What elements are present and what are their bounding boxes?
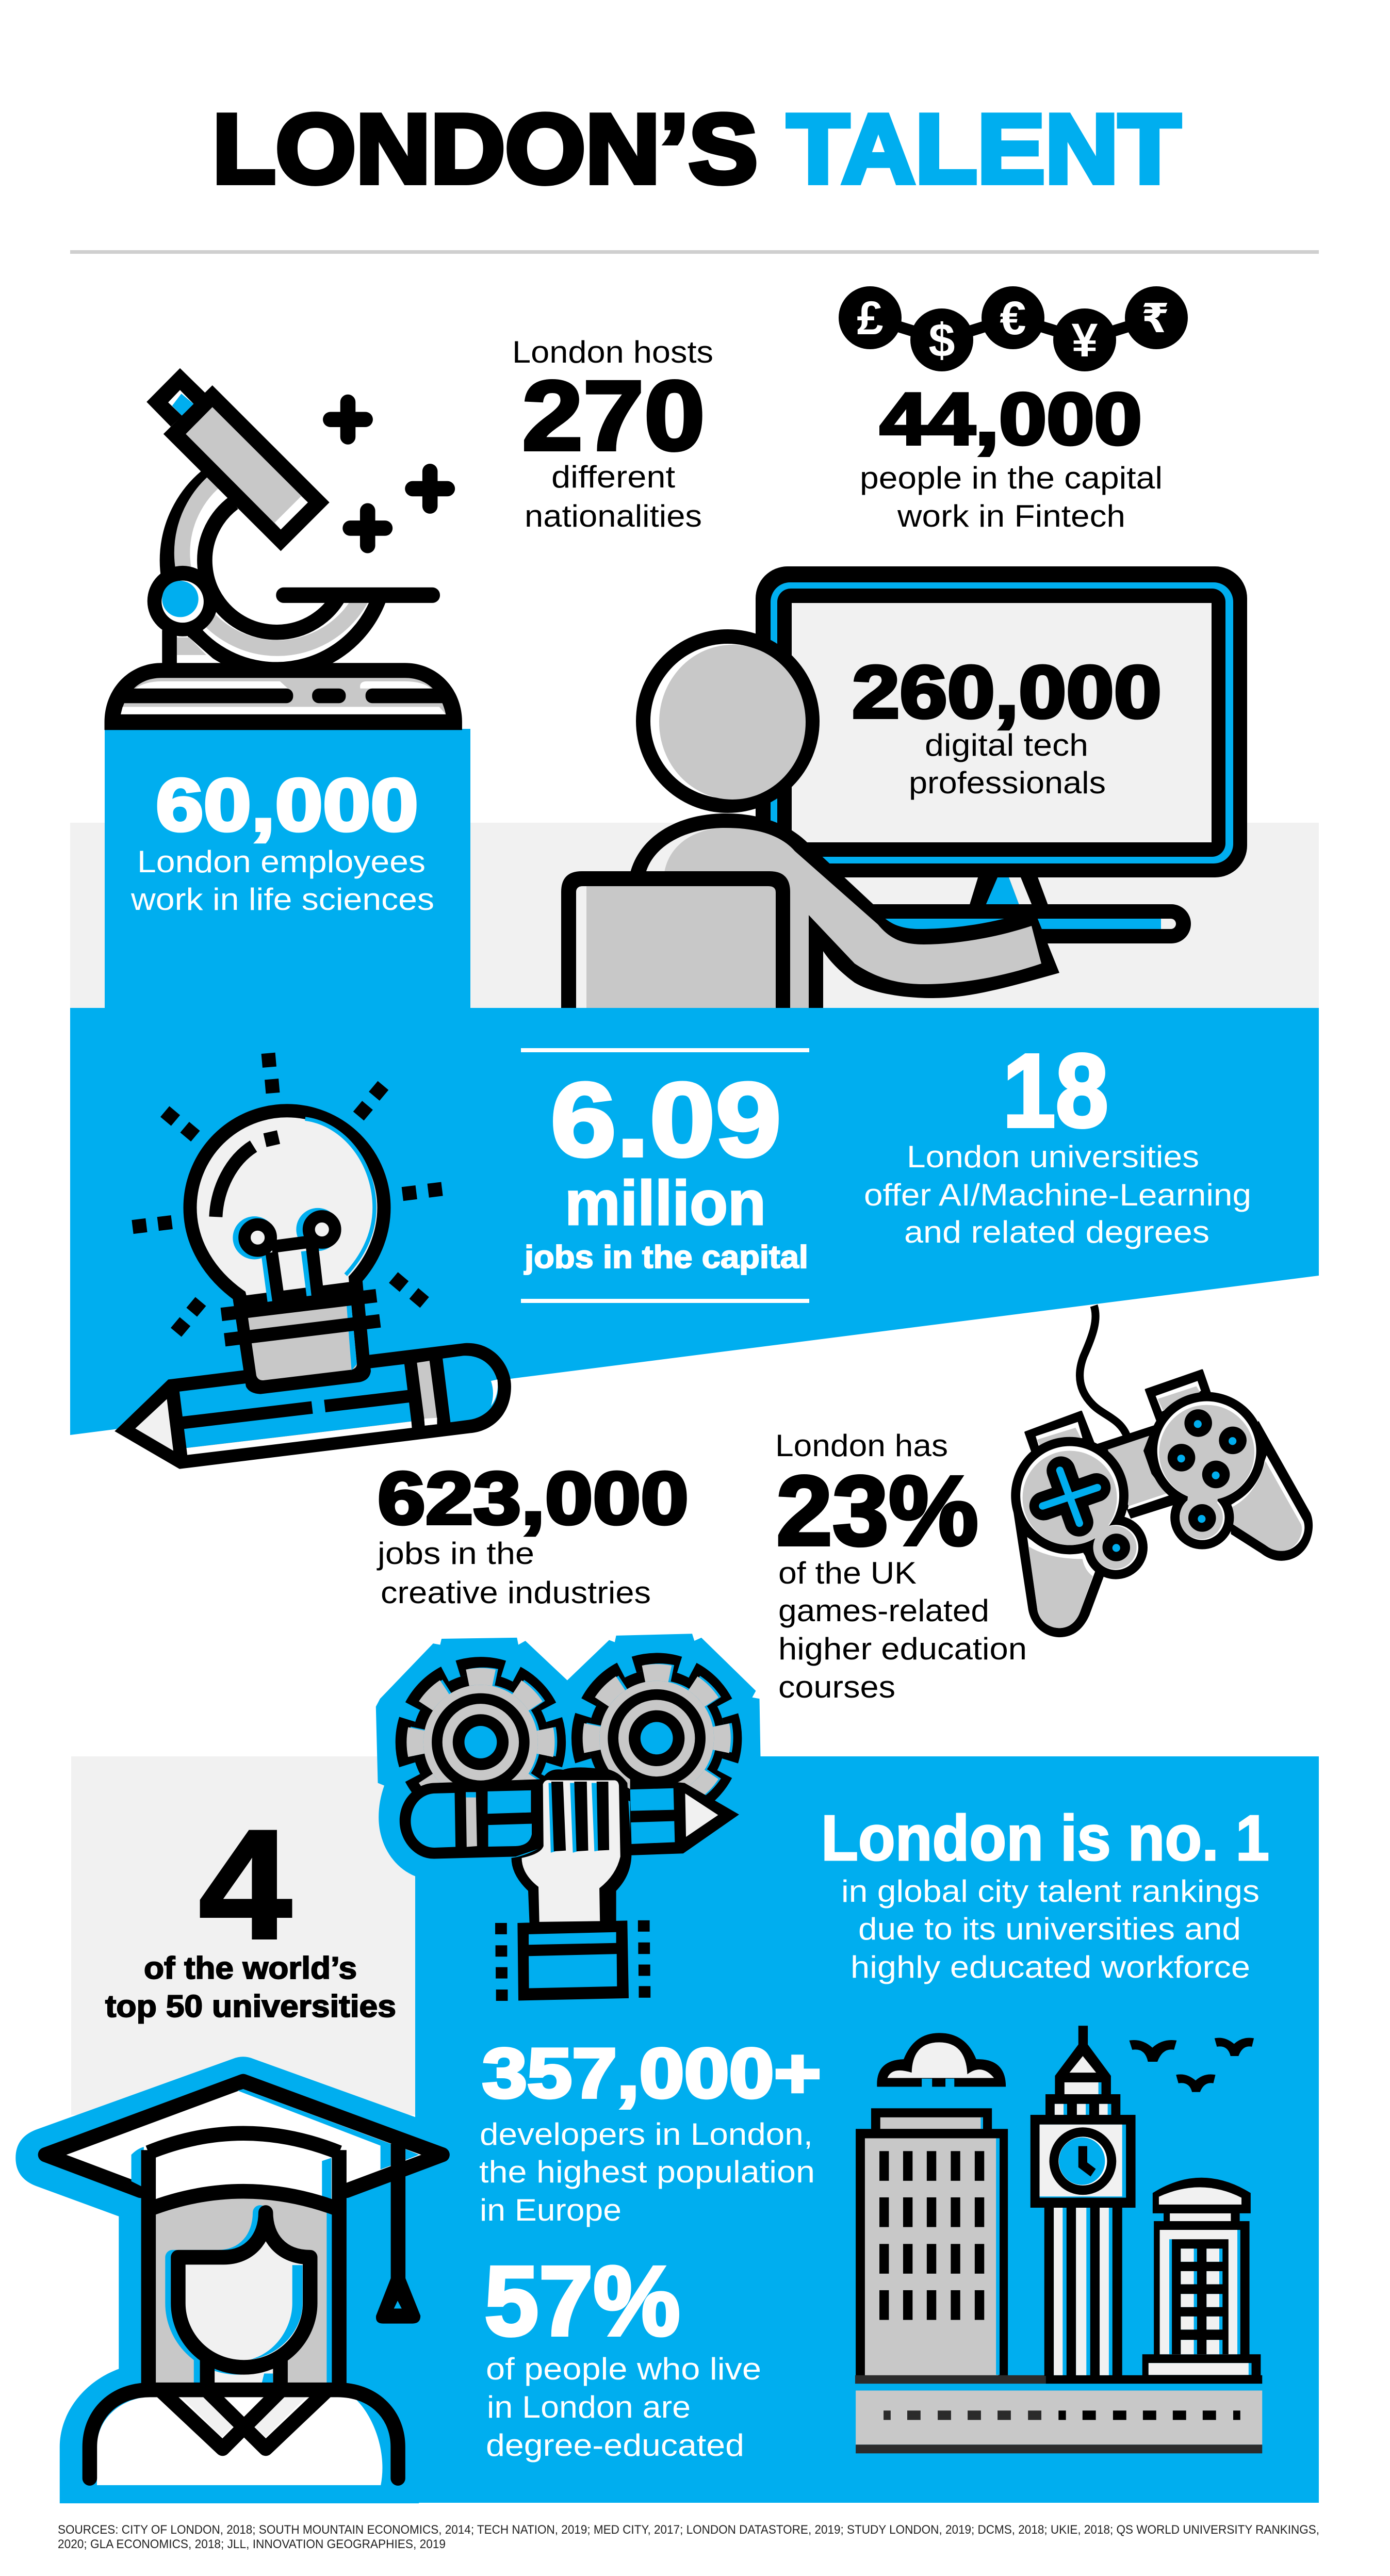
text: 23% games: higher education [778,1632,1027,1666]
text: sources [58,2523,1319,2551]
text: 270 nationalities: London hosts [512,335,713,369]
text: 260,000 digital tech: professionals [909,765,1106,800]
text: 6.09 million jobs [521,1048,809,1303]
text: 23% games: of the UK [778,1556,917,1590]
text: 44,000 fintech [860,378,1163,533]
text: 18 universities [864,1032,1251,1249]
text: 18 universities: 18 [1003,1032,1108,1149]
text: 623,000 creative industries [377,1457,689,1610]
text: 357,000+ developers [479,2034,821,2227]
text: 23% games: courses [778,1670,895,1704]
text: London is no. 1: highly educated workforce [851,1950,1250,1984]
text: 18 universities: offer AI/Machine-Learning [864,1178,1251,1212]
text: 60,000 life sciences [130,763,434,917]
icon: person at computer [561,629,1059,1008]
text: London is no. 1: London is no. 1 [821,1803,1269,1874]
text: 60,000 life sciences: work in life sciences [130,882,434,917]
icon: currency coins [839,286,1188,371]
text: 4 universities [105,1798,396,2024]
icon: gears pencil and hand [376,1634,761,2001]
text: 270 nationalities: different [551,460,675,494]
icon: London skyline [855,2026,1262,2453]
icon: graduate with cap [15,2057,443,2503]
icon: computer monitor [756,566,1247,943]
panel: life sciences blue column [105,729,470,1008]
text: London is no. 1: in global city talent rankings [841,1874,1260,1909]
icon: currency coins: $ [928,314,955,367]
panel: light grey universities panel [71,1756,422,2115]
text: sources: 2020; GLA ECONOMICS, 2018; JLL, INNOVATION GEOGRAPHIES, 2019 [58,2537,446,2551]
text: 57% degree-educated: of people who live [486,2352,761,2386]
text: 44,000 fintech: work in Fintech [897,499,1125,533]
text: 60,000 life sciences: 60,000 [156,763,418,846]
text: 270 nationalities: 270 [522,360,705,471]
text: 23% games: 23% [776,1455,978,1566]
text: 44,000 fintech: 44,000 [880,378,1142,460]
text: 6.09 million jobs: jobs in the capital [524,1240,808,1275]
icon: light bulb on pencil [115,1053,511,1469]
text: 18 universities: and related degrees [904,1215,1209,1249]
icon: game controller [1011,1306,1313,1637]
text: 57% degree-educated: in London are [487,2390,691,2424]
text: 260,000 digital tech: 260,000 [852,650,1162,733]
text: 270 nationalities: nationalities [525,499,702,533]
text: 357,000+ developers: 357,000+ [482,2034,821,2112]
icon: currency coins: ¥ [1071,314,1098,367]
text: 6.09 million jobs: 6.09 [550,1061,781,1179]
text: 357,000+ developers: developers in London, [480,2117,813,2151]
title: LONDON’S [212,94,758,204]
text: 260,000 digital tech: digital tech [925,728,1088,762]
text: 4 universities: 4 [199,1798,292,1971]
icon: currency coins: ₹ [1141,296,1169,342]
text: 23% games: London has [775,1428,948,1463]
text: London is no. 1 [821,1803,1269,1984]
text: 623,000 creative industries: jobs in the [377,1536,534,1571]
text: 44,000 fintech: people in the capital [860,461,1163,495]
panel: light grey band [70,823,1319,1008]
panel: large blue panel [415,1756,1319,2503]
text: 23% games [775,1428,1027,1704]
title: TALENT [787,94,1181,204]
text: 6.09 million jobs: million [565,1168,766,1238]
text: 18 universities: London universities [907,1139,1199,1174]
text: 57% degree-educated: 57% [484,2245,680,2356]
text: 270 nationalities [512,335,713,533]
text: 60,000 life sciences: London employees [137,844,426,879]
text: 357,000+ developers: the highest population [479,2155,815,2189]
text: sources: SOURCES: CITY OF LONDON, 2018; SOUTH MOUNTAIN ECONOMICS, 2014; TECH NATION, 2019; MED CITY, 2017; LONDON DATASTORE, 2019; STUDY LONDON, 2019; DCMS, 2018; UKIE, 2018; QS WORLD UNIVERSITY RANKINGS, [58,2523,1319,2537]
panel: blue slanted band [70,1008,1319,1435]
text: 260,000 digital tech [852,650,1162,800]
icon: currency coins: £ [857,292,884,345]
text: 57% degree-educated [484,2245,761,2463]
title [212,94,1181,204]
text: 623,000 creative industries: creative industries [381,1575,651,1610]
icon: currency coins: € [1000,292,1026,345]
text: 23% games: games-related [778,1593,989,1628]
text: 623,000 creative industries: 623,000 [378,1457,689,1540]
icon: microscope [105,368,462,730]
text: 4 universities: of the world’s [144,1951,357,1985]
text: 4 universities: top 50 universities [105,1989,396,2024]
text: 357,000+ developers: in Europe [480,2193,622,2227]
text: 57% degree-educated: degree-educated [486,2428,744,2463]
text: London is no. 1: due to its universities and [858,1912,1241,1946]
